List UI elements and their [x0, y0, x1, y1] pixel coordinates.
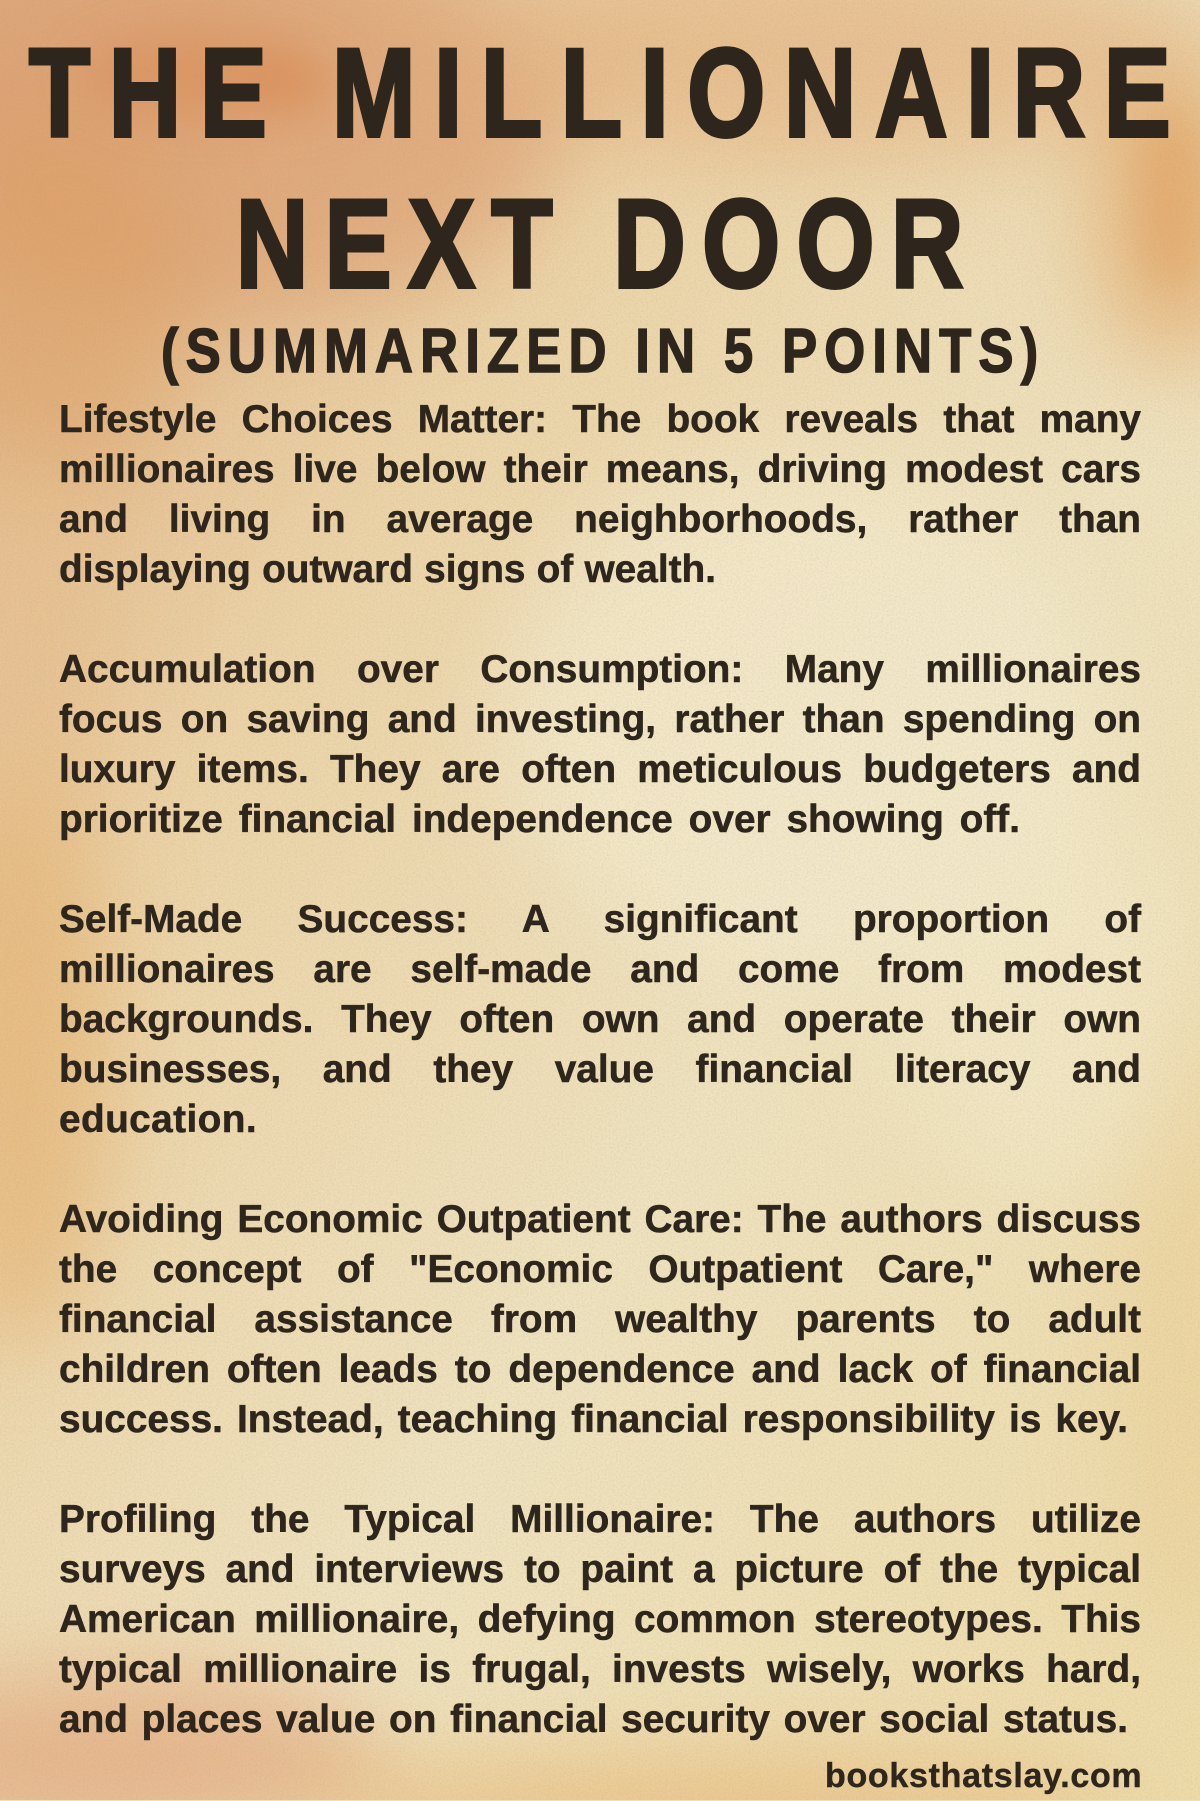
point 2: accumulation over consumption: prioritize financial independence over showing off. — [59, 798, 1020, 841]
point 4: economic outpatient care: the concept of "Economic Outpatient Care," where — [59, 1248, 1141, 1291]
subtitle: (SUMMARIZED IN 5 POINTS) — [161, 317, 1038, 386]
point 3: self-made success: education. — [59, 1098, 257, 1141]
point 5: profiling the typical millionaire: typical millionaire is frugal, invests wisely, works hard, — [59, 1648, 1141, 1691]
point 2: accumulation over consumption: focus on saving and investing, rather than spending on — [59, 698, 1141, 741]
point 1: lifestyle choices: millionaires live below their means, driving modest cars — [59, 448, 1141, 491]
point 4: economic outpatient care — [59, 1198, 1141, 1441]
point 3: self-made success — [59, 898, 1142, 1141]
point 2: accumulation over consumption: Accumulation over Consumption: Many millionaires — [59, 648, 1141, 691]
point 5: profiling the typical millionaire: surveys and interviews to paint a picture of the typical — [59, 1548, 1141, 1591]
point 3: self-made success: backgrounds. They often own and operate their own — [59, 998, 1141, 1041]
point 1: lifestyle choices — [59, 398, 1142, 591]
point 2: accumulation over consumption: luxury items. They are often meticulous budgeters and — [59, 748, 1141, 791]
point 2: accumulation over consumption — [59, 648, 1141, 841]
point 1: lifestyle choices: Lifestyle Choices Matter: The book reveals that many — [59, 398, 1141, 441]
point 4: economic outpatient care: success. Instead, teaching financial responsibility is key. — [59, 1398, 1128, 1441]
point 3: self-made success: millionaires are self-made and come from modest — [59, 948, 1141, 991]
point 4: economic outpatient care: Avoiding Economic Outpatient Care: The authors discuss — [59, 1198, 1141, 1241]
footer: website credit: booksthatslay.com — [825, 1757, 1142, 1795]
point 1: lifestyle choices: displaying outward signs of wealth. — [59, 548, 716, 591]
point 1: lifestyle choices: and living in average neighborhoods, rather than — [59, 498, 1141, 541]
point 3: self-made success: Self-Made Success: A significant proportion of — [59, 898, 1141, 941]
title line 1: THE MILLIONAIRE — [29, 23, 1171, 163]
point 3: self-made success: businesses, and they value financial literacy and — [59, 1048, 1141, 1091]
heading block — [28, 23, 1171, 386]
point 4: economic outpatient care: children often leads to dependence and lack of financial — [59, 1348, 1141, 1391]
title line 2: NEXT DOOR — [236, 174, 963, 314]
point 5: profiling the typical millionaire: Profiling the Typical Millionaire: The authors utilize — [59, 1498, 1141, 1541]
point 5: profiling the typical millionaire: and places value on financial security over social status. — [59, 1698, 1128, 1741]
point 5: profiling the typical millionaire: American millionaire, defying common stereotypes. This — [59, 1598, 1141, 1641]
point 4: economic outpatient care: financial assistance from wealthy parents to adult — [59, 1298, 1141, 1341]
point 5: profiling the typical millionaire — [59, 1498, 1141, 1741]
